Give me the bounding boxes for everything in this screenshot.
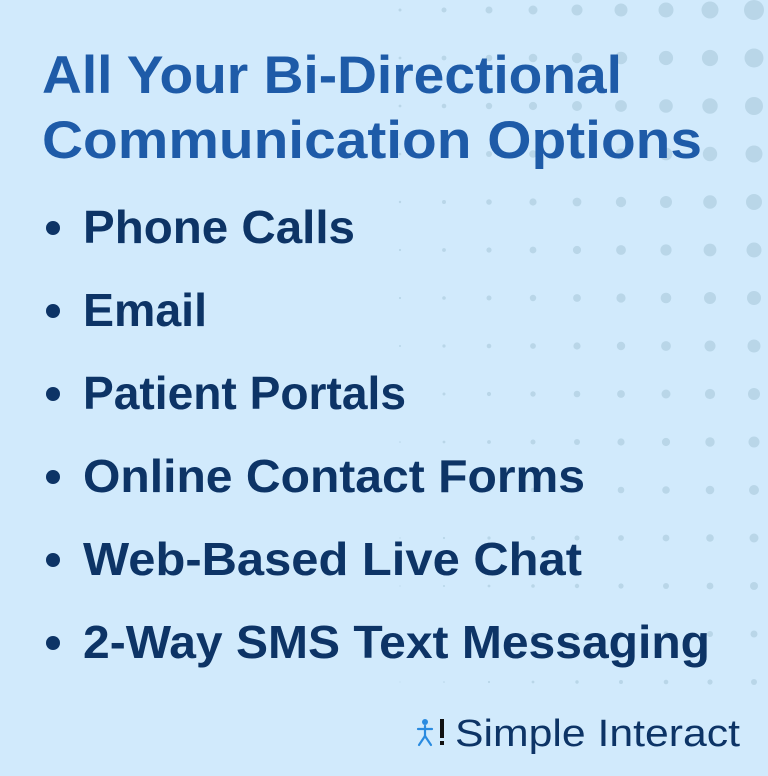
item: Phone Calls: Phone Calls [83, 201, 355, 253]
item: Patient Portals: Patient Portals [83, 367, 406, 419]
logo: Simple Interact: Simple Interact [455, 713, 740, 755]
background dot pattern [398, 0, 764, 685]
icon: stick figure [418, 719, 432, 745]
title: All Your Bi-Directional [42, 46, 622, 105]
title: Communication Options [42, 111, 702, 170]
icon: exclamation [440, 719, 444, 745]
item: Email: Email [83, 284, 207, 336]
item: Online Contact Forms: Online Contact Forms [83, 450, 585, 502]
list of communication options [46, 201, 710, 668]
title [42, 46, 702, 170]
item: Web-Based Live Chat: Web-Based Live Chat [83, 533, 582, 585]
item: 2-Way SMS Text Messaging: 2-Way SMS Text Messaging [83, 616, 710, 668]
